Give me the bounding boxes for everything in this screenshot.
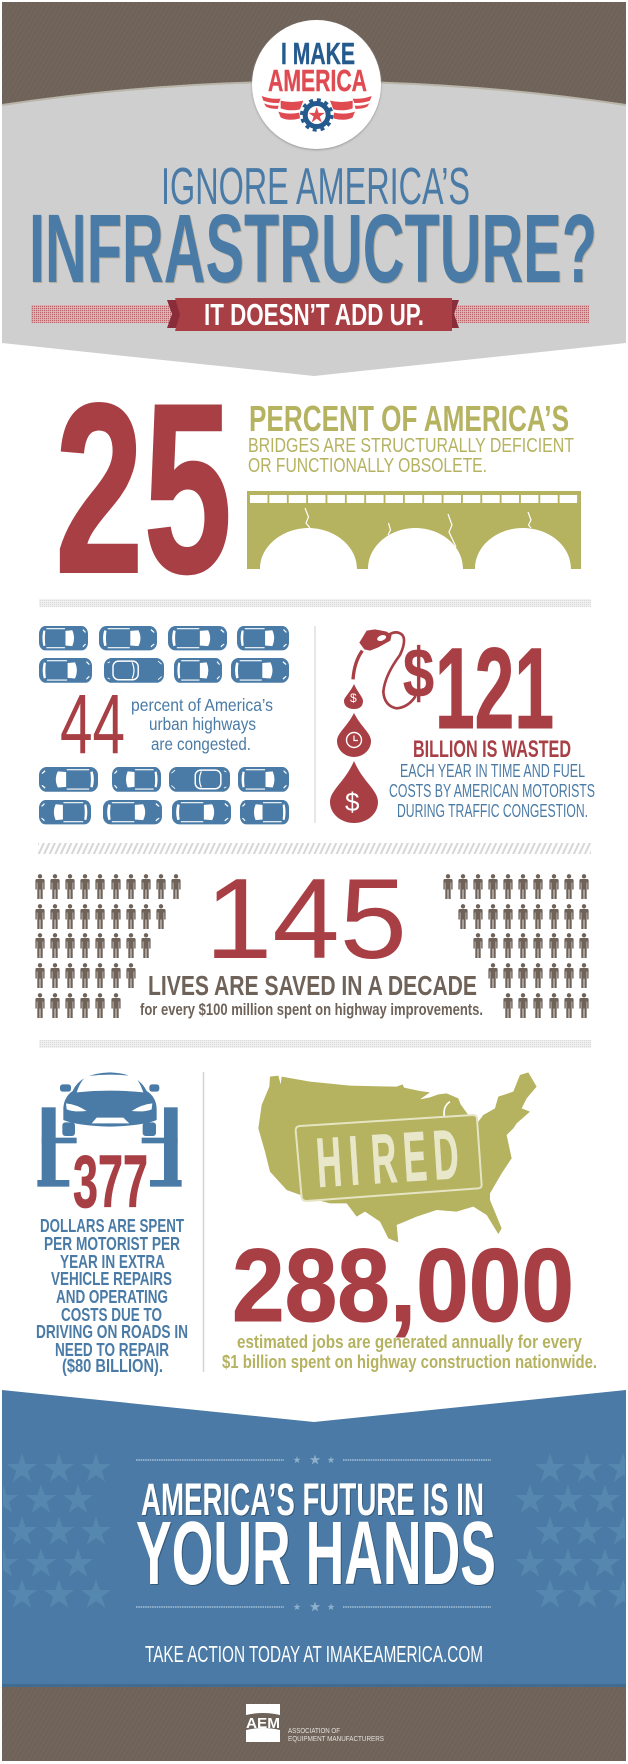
text block: repair cost description: VEHICLE REPAIRS — [51, 1269, 172, 1289]
logo badge: I Make America — [252, 20, 381, 149]
logo wings — [262, 96, 372, 120]
stat: $121 billion wasted: $ — [403, 634, 434, 712]
decorative star row bottom — [136, 1602, 491, 1611]
footer band with AEM logo — [2, 1687, 626, 1761]
AEM logo: AEM — [246, 1716, 280, 1732]
icon: US map with hired stamp: HIRED — [314, 1115, 461, 1202]
header band: brown with logo — [2, 2, 626, 376]
call to action panel — [0, 1390, 628, 1687]
icon: car on lift — [37, 1072, 182, 1187]
stat: 145 lives saved: 145 — [205, 856, 407, 983]
icons: bottom rows of cars — [39, 767, 289, 824]
AEM logo: ASSOCIATION OF — [288, 1726, 340, 1735]
text block: repair cost description: YEAR IN EXTRA — [60, 1252, 165, 1272]
AEM logo — [246, 1704, 384, 1743]
AEM logo: EQUIPMENT MANUFACTURERS — [288, 1734, 384, 1743]
icon: fuel drops — [330, 684, 378, 823]
ribbon: It doesn't add up: IT DOESN’T ADD UP. — [204, 298, 424, 332]
logo gear and star — [302, 100, 332, 130]
text block: repair cost description: COSTS DUE TO — [61, 1305, 162, 1325]
ribbon: It doesn't add up — [31, 298, 589, 332]
icon: fuel drops: $ — [345, 787, 360, 817]
text block: repair cost description: ($80 BILLION). — [62, 1356, 163, 1376]
stat: 377 dollars vehicle repairs — [36, 1072, 188, 1376]
icons: people right — [443, 874, 589, 1018]
stat: 44 percent congested: 44 — [60, 677, 125, 771]
text block: repair cost description: DRIVING ON ROADS IN — [36, 1322, 188, 1342]
icons: top rows of cars — [39, 626, 289, 683]
stat: 288,000 jobs — [222, 1072, 597, 1372]
logo badge: I Make America: AMERICA — [268, 63, 367, 98]
stat: 288,000 jobs: 288,000 — [232, 1228, 574, 1344]
stat: 377 dollars vehicle repairs: 377 — [73, 1140, 148, 1223]
stat: 44 percent congested: urban highways — [149, 714, 256, 734]
text block: repair cost description: PER MOTORIST PER — [44, 1234, 180, 1254]
stat: 44 percent congested — [39, 626, 289, 824]
stat: 145 lives saved — [35, 856, 589, 1019]
icons: people left — [35, 874, 181, 1018]
icon: US map with hired stamp — [258, 1072, 537, 1242]
star pattern right — [515, 1453, 628, 1608]
stat: 145 lives saved: LIVES ARE SAVED IN A DECADE — [148, 970, 477, 1001]
stat: $121 billion wasted: 121 — [435, 625, 554, 753]
text block: repair cost description: DOLLARS ARE SPENT — [40, 1216, 184, 1236]
star pattern left — [0, 1453, 111, 1608]
call to action heading — [136, 1474, 496, 1604]
stat: 25 percent of bridges — [55, 354, 581, 624]
icon: fuel nozzle and hose — [353, 629, 416, 708]
stat: 44 percent congested: are congested. — [151, 734, 251, 754]
icon: cracked bridge — [247, 491, 581, 569]
stat: $121 billion wasted — [330, 625, 595, 823]
stat: 44 percent congested: percent of America’s — [131, 695, 273, 715]
grey title panel — [2, 82, 626, 376]
text block: repair cost description: NEED TO REPAIR — [55, 1340, 169, 1360]
stat: 25 percent of bridges: OR FUNCTIONALLY OBSOLETE. — [248, 454, 487, 477]
text block: repair cost description — [36, 1216, 188, 1376]
decorative star row top — [136, 1454, 491, 1464]
icon: fuel drops: $ — [350, 691, 357, 705]
stat: 25 percent of bridges: 25 — [55, 354, 232, 624]
logo badge: I Make America: I MAKE — [281, 36, 355, 71]
stat: 145 lives saved: for every $100 million spent on highway improvements. — [140, 1001, 483, 1019]
text block: repair cost description: AND OPERATING — [56, 1287, 168, 1307]
